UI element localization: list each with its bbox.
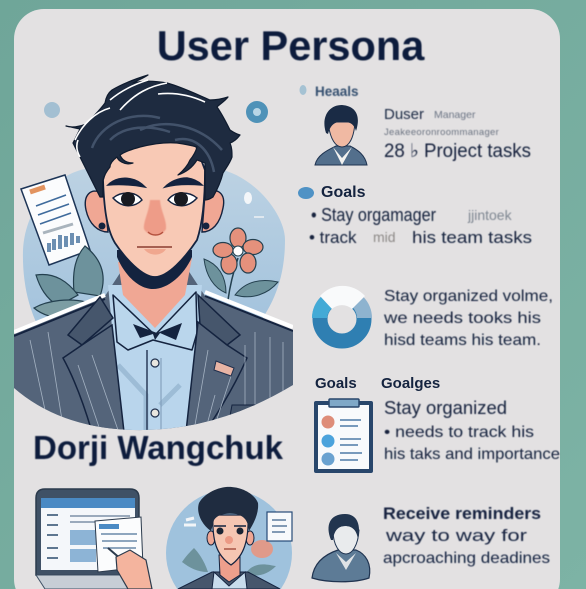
panel: main portrait <box>14 75 293 440</box>
decorative dot left <box>44 102 60 118</box>
eyes <box>113 192 197 206</box>
text: goals list: mid <box>373 229 396 245</box>
left lapel lower <box>63 325 124 432</box>
face <box>103 130 205 277</box>
mini ears <box>207 531 215 545</box>
text: goals list <box>309 205 532 247</box>
eyebrows <box>108 178 202 187</box>
collar <box>113 292 197 350</box>
nose <box>144 200 166 235</box>
text: receive reminders: apcroaching deadines <box>383 550 550 567</box>
text: goals list: his team tasks <box>412 228 532 247</box>
pin badge <box>214 361 234 376</box>
neck shadow <box>117 250 192 289</box>
neck <box>118 258 192 328</box>
icon: document <box>21 175 90 265</box>
text: user details: Jeakeeoronroommanager <box>384 127 499 138</box>
right lapel upper <box>198 295 240 345</box>
mini hair <box>198 487 258 531</box>
icon: donut chart <box>312 286 372 341</box>
text: organised summary <box>383 288 553 349</box>
mini suit <box>178 572 280 589</box>
hair <box>66 75 240 200</box>
mini face <box>213 515 248 565</box>
text: organised summary: hisd teams his team. <box>384 332 541 349</box>
icon: clipboard checklist <box>314 399 373 473</box>
suit and shirt <box>14 270 293 440</box>
persona name: Dorji Wangchuk <box>33 429 284 466</box>
mouth <box>137 246 172 248</box>
icon: person <box>312 514 370 582</box>
icon: sparkle marks <box>244 192 264 217</box>
icon: small avatar <box>315 105 367 165</box>
section heading: goals: Goals <box>321 184 366 201</box>
text: user details: 28 ♭ Project tasks <box>384 141 531 162</box>
text: stay organized <box>384 398 560 463</box>
text: user details: Duser <box>384 106 424 123</box>
mini neck <box>219 555 240 582</box>
icon: laptop with hand <box>36 489 152 589</box>
section heading: goalges: Goalges <box>381 375 440 392</box>
text: user details <box>384 106 531 162</box>
text: stay organized: his taks and importance <box>384 446 560 463</box>
right lapel lower <box>186 322 247 432</box>
pinstripes <box>30 332 283 432</box>
text: goals list: • track <box>309 228 357 247</box>
text: receive reminders <box>383 504 550 567</box>
icon: header bullet <box>300 85 306 95</box>
title: User Persona <box>157 22 425 69</box>
mini leaves <box>182 548 208 572</box>
text: organised summary: we needs tooks his <box>383 310 541 327</box>
left lapel upper <box>68 297 113 345</box>
icon: mini portrait <box>166 487 292 589</box>
text: stay organized: • needs to track his <box>384 424 534 441</box>
text: stay organized: Stay organized <box>384 398 507 418</box>
hair highlights <box>75 80 205 157</box>
text: user details: Manager <box>434 109 476 121</box>
shirt buttons <box>151 359 159 367</box>
mini document <box>267 512 292 541</box>
text: goals list: • Stay orgamager <box>311 205 436 225</box>
text: receive reminders: way to way for <box>385 526 527 545</box>
blue backdrop <box>23 168 285 345</box>
icon: goals bullet <box>298 187 314 199</box>
text: receive reminders: Receive reminders <box>383 504 541 523</box>
shirt <box>108 285 202 432</box>
icon: leaves left <box>34 246 103 318</box>
section heading: goals left: Goals <box>315 375 357 392</box>
text: organised summary: Stay organized volme, <box>384 288 553 305</box>
text: goals list: jjintoek <box>467 207 513 223</box>
icon: flower <box>204 228 278 300</box>
section heading: top: Heaals <box>315 84 359 99</box>
decorative dot right <box>246 101 268 123</box>
ears <box>85 191 224 232</box>
